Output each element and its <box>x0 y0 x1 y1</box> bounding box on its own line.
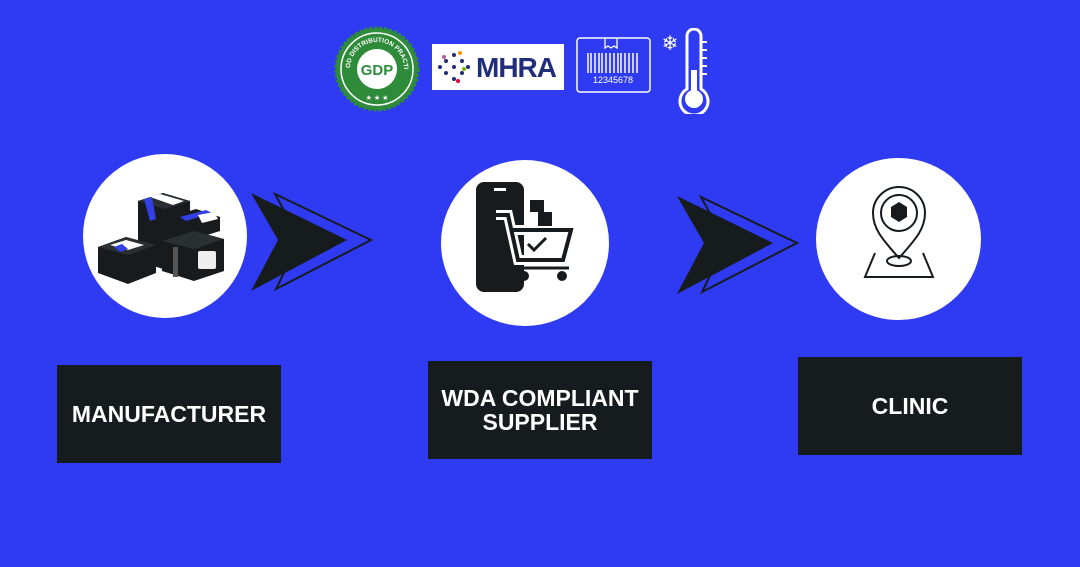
logo: MHRA: MHRA <box>476 52 556 83</box>
right top box <box>170 209 220 239</box>
circle: manufacturer icon <box>83 154 247 318</box>
label: WDA compliant supplier: SUPPLIER <box>482 409 598 435</box>
label: WDA compliant supplier <box>428 361 652 459</box>
label: WDA compliant supplier: WDA COMPLIANT <box>441 385 639 411</box>
label: clinic: CLINIC <box>872 393 948 419</box>
icon: snowflake thermometer: ❄ <box>662 33 678 55</box>
arrow 2 <box>677 194 800 294</box>
back tall box <box>138 193 190 269</box>
label: manufacturer <box>57 365 281 463</box>
logo: GDP seal <box>334 26 420 112</box>
label: manufacturer: MANUFACTURER <box>72 401 266 427</box>
left small box <box>98 237 156 284</box>
icon: snowflake thermometer <box>662 28 710 114</box>
logo: GDP seal: ★ ★ ★ <box>366 94 388 102</box>
icon: barcode box: 12345678 <box>593 75 633 85</box>
arrow 1 <box>251 192 374 292</box>
label: clinic <box>798 357 1022 455</box>
icon: barcode box <box>576 37 651 93</box>
logo: GDP seal: GDP <box>361 62 393 79</box>
right big box <box>162 231 224 281</box>
logo: MHRA <box>432 44 564 90</box>
circle: clinic icon <box>816 158 981 320</box>
circle: supplier icon <box>441 160 609 326</box>
